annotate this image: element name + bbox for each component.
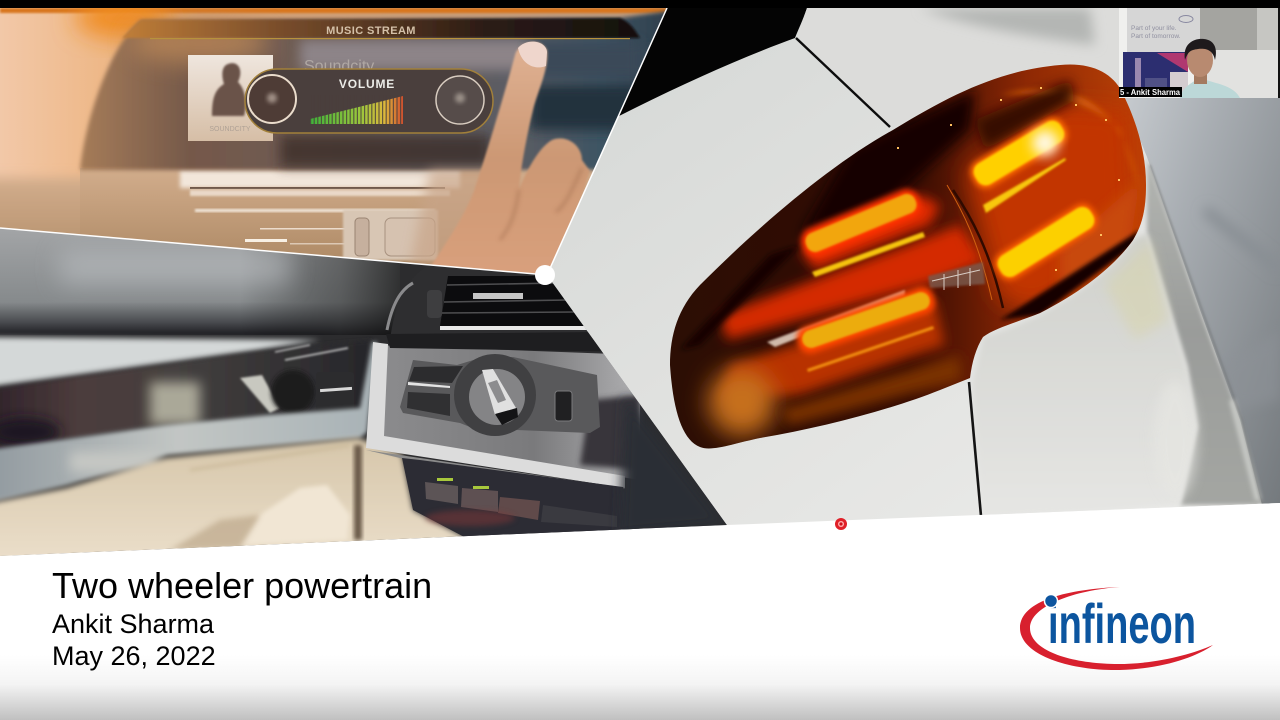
window buttons — [316, 372, 354, 412]
sparkles — [897, 88, 1120, 270]
banner — [1123, 52, 1188, 97]
poster: Part of your life. — [1131, 25, 1177, 32]
blurred foreground — [620, 395, 727, 535]
red glow bands — [720, 225, 985, 340]
poster — [1127, 8, 1200, 53]
name tag: 5 - Ankit Sharma — [1120, 87, 1180, 97]
seam between lamp sections — [953, 190, 1003, 308]
wordmark: infineon — [1048, 592, 1196, 655]
footer band — [0, 503, 1280, 720]
tail light — [670, 64, 1146, 448]
presenter — [1180, 39, 1240, 98]
volume label: VOLUME — [339, 77, 395, 91]
title block — [52, 565, 432, 671]
lower console buttons — [402, 458, 640, 540]
date: May 26, 2022 — [52, 641, 216, 671]
light bar: right lower — [990, 199, 1102, 285]
lower shut line — [969, 382, 981, 516]
height adjuster — [555, 391, 572, 421]
air vent — [386, 276, 586, 334]
car body — [540, 8, 1280, 538]
photo: touch screen infotainment — [0, 8, 666, 274]
poster: Part of tomorrow. — [1131, 33, 1181, 40]
upper shut line — [796, 38, 890, 127]
screen title: MUSIC STREAM — [326, 25, 416, 37]
light bar: left upper — [797, 185, 925, 277]
Infineon logo — [1020, 587, 1213, 670]
left dial — [248, 75, 296, 123]
volume control — [245, 69, 493, 133]
seat cushion — [240, 485, 350, 545]
level bars — [310, 96, 403, 124]
webcam tile — [1118, 8, 1280, 98]
lower chrome strip — [0, 342, 377, 505]
studio backdrop — [1125, 98, 1280, 504]
car flank shadow band — [1147, 157, 1262, 505]
cream door upholstery — [0, 436, 463, 556]
upper hatch panel — [802, 8, 1119, 86]
wall — [1200, 8, 1257, 50]
junction dot — [535, 265, 555, 285]
light bar: left lower — [793, 283, 939, 372]
dashboard below the screen — [0, 168, 593, 264]
display screen — [80, 8, 690, 170]
rotary knob — [454, 354, 536, 436]
dot — [1044, 594, 1058, 608]
photo: door panel and light switch — [0, 225, 730, 570]
laser pointer — [835, 518, 847, 530]
album cover — [188, 55, 273, 141]
photo: white car with tail light — [540, 8, 1280, 538]
top black bar — [0, 0, 1280, 8]
switch surround — [366, 332, 640, 493]
diagonal white edges — [0, 8, 667, 275]
light switch panel — [400, 354, 600, 436]
right dial — [436, 76, 484, 124]
lower quarter panel — [972, 233, 1197, 520]
presenter: Ankit Sharma — [52, 609, 215, 639]
light bar: right upper — [966, 113, 1072, 213]
upper chrome reflection — [0, 337, 320, 388]
title: Two wheeler powertrain — [52, 565, 432, 606]
dark glossy insert — [0, 343, 352, 447]
track name: Soundcity — [304, 58, 374, 75]
swoosh — [1020, 587, 1213, 670]
hand with pointing finger — [410, 42, 590, 276]
black gap above the body — [619, 8, 807, 116]
album cover: SOUNDCITY — [209, 126, 251, 133]
door trim — [0, 225, 470, 570]
white reflections — [767, 290, 905, 347]
